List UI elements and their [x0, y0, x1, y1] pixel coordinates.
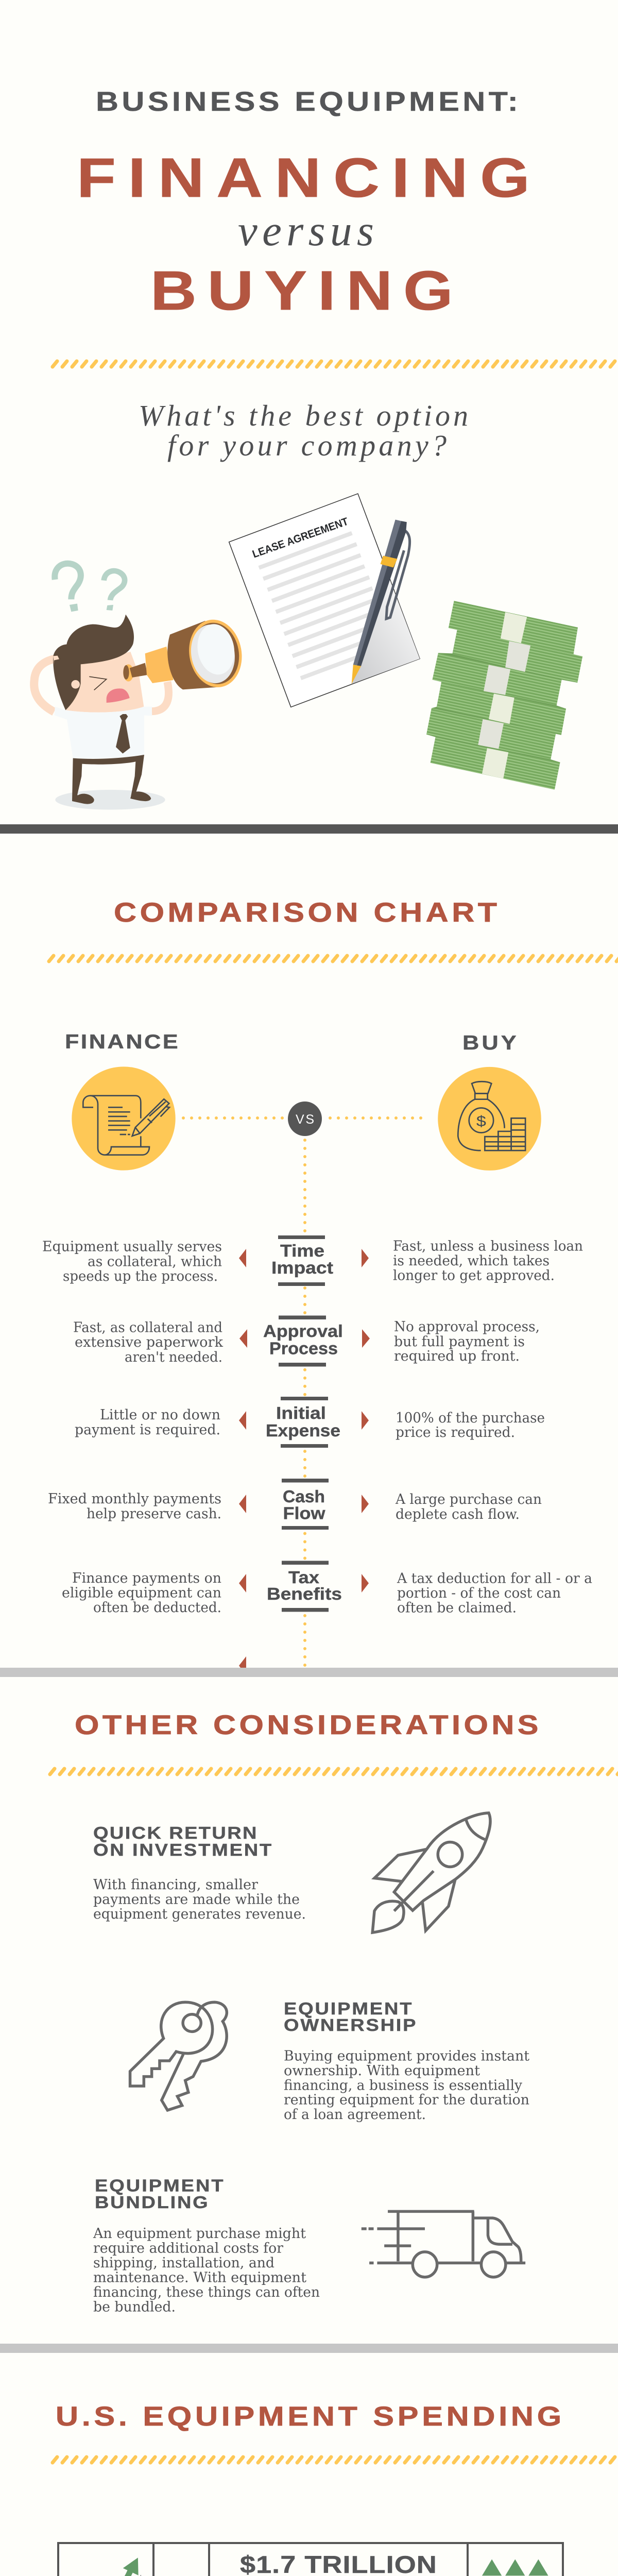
- text block: equipment ownership: ownership. With equipment: [284, 2063, 480, 2079]
- lease agreement heading: LEASE AGREEMENT: [251, 516, 350, 561]
- comparison row: tax benefits: often be claimed.: [397, 1600, 517, 1616]
- text block: equipment ownership: renting equipment for the duration: [284, 2092, 529, 2108]
- comparison row: cash flow: Cash: [283, 1487, 325, 1506]
- comparison row: cash flow: Fixed monthly payments: [48, 1491, 221, 1507]
- text block: equipment bundling: maintenance. With equipment: [93, 2270, 306, 2285]
- comparison row: approval process: Process: [269, 1338, 338, 1358]
- section heading: u.s. equipment spending: U.S. EQUIPMENT SPENDING: [56, 2401, 561, 2432]
- grey divider band: [0, 2344, 618, 2353]
- text block: equipment bundling: BUNDLING: [95, 2193, 208, 2212]
- section heading: other considerations: OTHER CONSIDERATIONS: [75, 1710, 538, 1740]
- comparison row: tax benefits: eligible equipment can: [62, 1585, 221, 1601]
- comparison row: cash flow: [48, 1479, 542, 1530]
- panel: $1.7 trillion: [58, 2543, 563, 2576]
- text block: quick return on investment: equipment generates revenue.: [93, 1906, 306, 1922]
- text block: equipment ownership: Buying equipment provides instant: [284, 2048, 529, 2064]
- comparison row: cash flow: Flow: [283, 1503, 325, 1523]
- clipped arrow at the end of the chart: [239, 1656, 246, 1668]
- comparison row: time impact: as collateral, which: [88, 1254, 222, 1269]
- column heading: finance: FINANCE: [65, 1030, 178, 1053]
- comparison row: approval process: required up front.: [394, 1348, 520, 1364]
- comparison row: initial expense: Expense: [266, 1421, 340, 1440]
- title: BUSINESS EQUIPMENT:: [96, 87, 518, 117]
- comparison row: tax benefits: portion - of the cost can: [397, 1585, 561, 1601]
- comparison row: tax benefits: Finance payments on: [72, 1570, 221, 1586]
- text block: equipment ownership: of a loan agreement.: [284, 2107, 426, 2123]
- comparison row: approval process: [73, 1316, 540, 1366]
- comparison row: initial expense: [75, 1397, 545, 1448]
- text block: equipment bundling: be bundled.: [93, 2299, 176, 2315]
- text block: equipment ownership: [284, 1999, 529, 2123]
- comparison row: initial expense: Initial: [276, 1403, 326, 1422]
- title: versus: [238, 207, 374, 255]
- comparison row: cash flow: help preserve cash.: [87, 1506, 221, 1522]
- comparison row: time impact: [42, 1235, 583, 1286]
- text block: quick return on investment: ON INVESTMENT: [93, 1840, 271, 1859]
- illustration: stack of cash: [426, 601, 582, 790]
- comparison row: approval process: but full payment is: [394, 1334, 525, 1350]
- icon: keys: [130, 2002, 227, 2110]
- illustration: confused man with telescope: [34, 564, 247, 810]
- text block: equipment bundling: [93, 2176, 320, 2315]
- comparison row: initial expense: 100% of the purchase: [396, 1410, 545, 1426]
- comparison row: approval process: Fast, as collateral and: [73, 1320, 222, 1335]
- column heading: buy: BUY: [462, 1031, 517, 1054]
- illustration: lease agreement and pen: [229, 494, 420, 707]
- text block: equipment ownership: OWNERSHIP: [284, 2015, 416, 2035]
- comparison row: tax benefits: A tax deduction for all - or a: [397, 1570, 592, 1587]
- comparison row: tax benefits: Tax: [288, 1568, 320, 1587]
- comparison row: approval process: No approval process,: [394, 1319, 540, 1335]
- section heading: comparison chart: COMPARISON CHART: [114, 897, 497, 928]
- vs badge: [288, 1101, 322, 1136]
- subtitle question: [139, 399, 468, 462]
- subtitle question: What's the best option: [139, 399, 468, 432]
- comparison row: time impact: Fast, unless a business loan: [393, 1239, 583, 1254]
- icon: buy money bag: $: [476, 1113, 486, 1130]
- dark divider band: [0, 824, 618, 834]
- text block: equipment ownership: EQUIPMENT: [284, 1999, 412, 2018]
- comparison row: time impact: speeds up the process.: [63, 1268, 218, 1284]
- icon: finance scroll and pen: [72, 1066, 176, 1171]
- title: FINANCING: [77, 147, 530, 209]
- grey divider band: [0, 1668, 618, 1677]
- text block: equipment bundling: An equipment purchase might: [93, 2226, 306, 2242]
- comparison row: approval process: extensive paperwork: [75, 1334, 224, 1350]
- title: [77, 87, 530, 321]
- comparison row: initial expense: Little or no down: [100, 1407, 220, 1423]
- comparison row: time impact: Time: [280, 1241, 324, 1260]
- comparison row: cash flow: deplete cash flow.: [396, 1506, 520, 1522]
- comparison row: approval process: Approval: [263, 1321, 343, 1341]
- comparison row: time impact: Equipment usually serves: [42, 1239, 222, 1255]
- comparison row: approval process: aren't needed.: [125, 1349, 222, 1365]
- text block: equipment bundling: EQUIPMENT: [95, 2176, 224, 2195]
- comparison row: time impact: longer to get approved.: [393, 1267, 555, 1284]
- comparison row: tax benefits: often be deducted.: [93, 1600, 221, 1616]
- comparison row: initial expense: price is required.: [396, 1425, 515, 1440]
- comparison row: cash flow: A large purchase can: [395, 1492, 542, 1507]
- comparison row: time impact: Impact: [271, 1258, 333, 1277]
- text block: quick return on investment: payments are made while the: [93, 1892, 300, 1907]
- text block: quick return on investment: With financing, smaller: [93, 1877, 258, 1893]
- triangle pictogram: [482, 2560, 548, 2576]
- text block: quick return on investment: QUICK RETURN: [93, 1823, 256, 1842]
- text block: equipment ownership: financing, a business is essentially: [284, 2077, 523, 2094]
- text block: quick return on investment: [93, 1823, 306, 1922]
- subtitle question: for your company?: [167, 429, 447, 462]
- comparison row: time impact: is needed, which takes: [393, 1253, 550, 1269]
- text block: equipment bundling: financing, these things can often: [93, 2284, 320, 2300]
- text block: equipment bundling: require additional costs for: [93, 2240, 283, 2257]
- comparison row: tax benefits: Benefits: [267, 1584, 342, 1603]
- icon: rocket: [372, 1813, 490, 1933]
- icon: growth chart: [69, 2557, 141, 2576]
- comparison row: tax benefits: [62, 1561, 592, 1616]
- title: BUYING: [150, 260, 453, 321]
- text block: equipment bundling: shipping, installation, and: [93, 2255, 274, 2271]
- icon: delivery truck: [362, 2211, 525, 2277]
- vs badge: VS: [296, 1112, 314, 1127]
- icon: buy money bag: [438, 1067, 541, 1171]
- comparison row: initial expense: payment is required.: [75, 1422, 220, 1438]
